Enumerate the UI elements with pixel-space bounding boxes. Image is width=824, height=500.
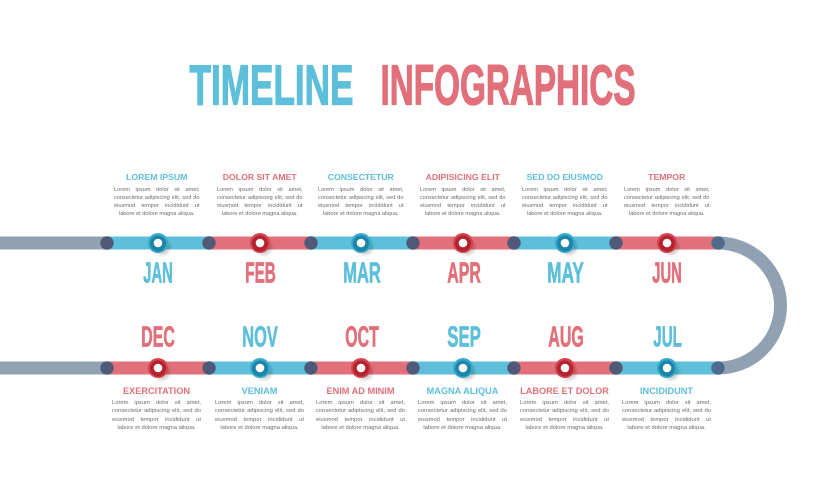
text block: Dolor Sit Amet xyxy=(217,172,302,217)
month labels: bottom row: AUG xyxy=(548,322,584,354)
month labels: bottom row: DEC xyxy=(141,322,175,354)
text: DOLOR SIT AMET xyxy=(223,172,297,182)
month labels: top row: FEB xyxy=(245,258,276,290)
text: VENIAM xyxy=(242,386,277,396)
text block: Consectetur: Lorem ipsum dolor sit amet, xyxy=(318,187,404,193)
text block: Magna Aliqua: consectetur adipiscing elit, sed do xyxy=(418,408,507,414)
title: TIMELINE xyxy=(190,53,354,116)
text block: Enim Ad Minim: eiusmod tempor incididunt ut xyxy=(316,417,405,423)
text block: Labore Et Dolor: Lorem ipsum dolor sit amet, xyxy=(520,400,609,406)
node centres xyxy=(154,239,671,372)
text block: Exercitation: consectetur adipiscing elit, sed do xyxy=(112,408,201,414)
text block: Tempor: Lorem ipsum dolor sit amet, xyxy=(624,187,710,193)
text block: Incididunt: labore et dolore magna aliqua. xyxy=(627,425,706,431)
text block: Consectetur: consectetur adipiscing elit, sed do xyxy=(318,195,404,201)
text block: Exercitation: Lorem ipsum dolor sit amet, xyxy=(112,400,201,406)
text block: Incididunt xyxy=(622,386,711,431)
node shadows xyxy=(154,239,679,380)
month labels: bottom row: NOV xyxy=(242,322,278,354)
text block: Labore Et Dolor: consectetur adipiscing elit, sed do xyxy=(520,408,609,414)
text block: Enim Ad Minim: labore et dolore magna aliqua. xyxy=(321,425,400,431)
text: ADIPISICING ELIT xyxy=(426,172,500,182)
text block: Tempor: eiusmod tempor incididunt ut xyxy=(624,203,710,209)
text: ENIM AD MINIM xyxy=(326,386,395,396)
text block: Exercitation: eiusmod tempor incididunt ut xyxy=(112,417,201,423)
text block: Consectetur: eiusmod tempor incididunt ut xyxy=(318,203,404,209)
text: LABORE ET DOLOR xyxy=(520,386,609,396)
text block: Labore Et Dolor: labore et dolore magna aliqua. xyxy=(525,425,604,431)
text block: Magna Aliqua: eiusmod tempor incididunt ut xyxy=(418,417,507,423)
text block: Consectetur: labore et dolore magna aliqua. xyxy=(323,211,399,217)
text block: Consectetur xyxy=(318,172,404,217)
text block: Tempor: consectetur adipiscing elit, sed do xyxy=(624,195,710,201)
month labels: top row xyxy=(143,258,682,290)
text block: Enim Ad Minim xyxy=(316,386,405,431)
text block: Tempor: labore et dolore magna aliqua. xyxy=(629,211,705,217)
text block: Enim Ad Minim: Lorem ipsum dolor sit amet, xyxy=(316,400,405,406)
text block: Lorem Ipsum: labore et dolore magna aliqua. xyxy=(119,211,195,217)
text: TEMPOR xyxy=(648,172,685,182)
text block: Exercitation xyxy=(112,386,201,431)
text block: Exercitation: labore et dolore magna aliqua. xyxy=(117,425,196,431)
month labels: bottom row: SEP xyxy=(447,322,481,354)
node inner discs xyxy=(150,236,675,376)
text block: Veniam xyxy=(215,386,304,431)
text block: Lorem Ipsum: eiusmod tempor incididunt ut xyxy=(114,203,200,209)
month labels: top row: JAN xyxy=(143,258,173,290)
text block: Dolor Sit Amet: consectetur adipiscing elit, sed do xyxy=(217,195,302,201)
text block: Adipisicing Elit xyxy=(420,172,506,217)
junction dots xyxy=(100,236,725,375)
text block: Adipisicing Elit: consectetur adipiscing elit, sed do xyxy=(420,195,506,201)
text block: Sed Do Eiusmod: labore et dolore magna aliqua. xyxy=(527,211,603,217)
text block: Dolor Sit Amet: Lorem ipsum dolor sit amet, xyxy=(217,187,302,193)
text: SED DO EIUSMOD xyxy=(527,172,603,182)
text block: Veniam: consectetur adipiscing elit, sed do xyxy=(215,408,304,414)
month labels: top row: JUN xyxy=(652,258,682,290)
text block: Adipisicing Elit: Lorem ipsum dolor sit amet, xyxy=(420,187,506,193)
text block: Incididunt: consectetur adipiscing elit, sed do xyxy=(622,408,711,414)
title: INFOGRAPHICS xyxy=(380,53,636,116)
month labels: bottom row: JUL xyxy=(653,322,682,354)
upper node outer rings xyxy=(148,233,677,253)
month labels: bottom row xyxy=(141,322,682,354)
text block: Dolor Sit Amet: labore et dolore magna aliqua. xyxy=(222,211,298,217)
month labels: bottom row: OCT xyxy=(345,322,379,354)
text block: Sed Do Eiusmod xyxy=(522,172,608,217)
text block: Veniam: labore et dolore magna aliqua. xyxy=(220,425,299,431)
month labels: top row: APR xyxy=(447,258,481,290)
text block: Incididunt: eiusmod tempor incididunt ut xyxy=(622,417,711,423)
text block: Dolor Sit Amet: eiusmod tempor incididunt ut xyxy=(217,203,302,209)
text: MAGNA ALIQUA xyxy=(427,386,498,396)
text block: Magna Aliqua: Lorem ipsum dolor sit amet, xyxy=(418,400,507,406)
text block: Sed Do Eiusmod: eiusmod tempor incididunt ut xyxy=(522,203,608,209)
text: INCIDIDUNT xyxy=(640,386,693,396)
text block: Incididunt: Lorem ipsum dolor sit amet, xyxy=(622,400,711,406)
text block: Veniam: eiusmod tempor incididunt ut xyxy=(215,417,304,423)
month labels: top row: MAY xyxy=(547,258,584,290)
text block: Sed Do Eiusmod: consectetur adipiscing elit, sed do xyxy=(522,195,608,201)
track: lower segments xyxy=(107,362,718,374)
text block: Tempor xyxy=(624,172,710,217)
text block: Labore Et Dolor xyxy=(520,386,609,431)
track: grey lead-ins and curve xyxy=(0,243,781,368)
text block: Magna Aliqua xyxy=(418,386,507,431)
text: CONSECTETUR xyxy=(328,172,394,182)
text block: Adipisicing Elit: labore et dolore magna aliqua. xyxy=(425,211,501,217)
text block: Enim Ad Minim: consectetur adipiscing elit, sed do xyxy=(316,408,405,414)
text block: Adipisicing Elit: eiusmod tempor incididunt ut xyxy=(420,203,506,209)
text block: Magna Aliqua: labore et dolore magna aliqua. xyxy=(423,425,502,431)
text block: Sed Do Eiusmod: Lorem ipsum dolor sit amet, xyxy=(522,187,608,193)
text block: Labore Et Dolor: eiusmod tempor incididunt ut xyxy=(520,417,609,423)
lower node outer rings xyxy=(148,358,677,378)
text block: Lorem Ipsum xyxy=(114,172,200,217)
text: EXERCITATION xyxy=(123,386,190,396)
text block: Lorem Ipsum: consectetur adipiscing elit, sed do xyxy=(114,195,200,201)
title xyxy=(190,53,636,116)
text block: Lorem Ipsum: Lorem ipsum dolor sit amet, xyxy=(114,187,200,193)
month labels: top row: MAR xyxy=(343,258,381,290)
text: LOREM IPSUM xyxy=(126,172,187,182)
track: upper segments xyxy=(107,236,718,250)
text block: Veniam: Lorem ipsum dolor sit amet, xyxy=(215,400,304,406)
